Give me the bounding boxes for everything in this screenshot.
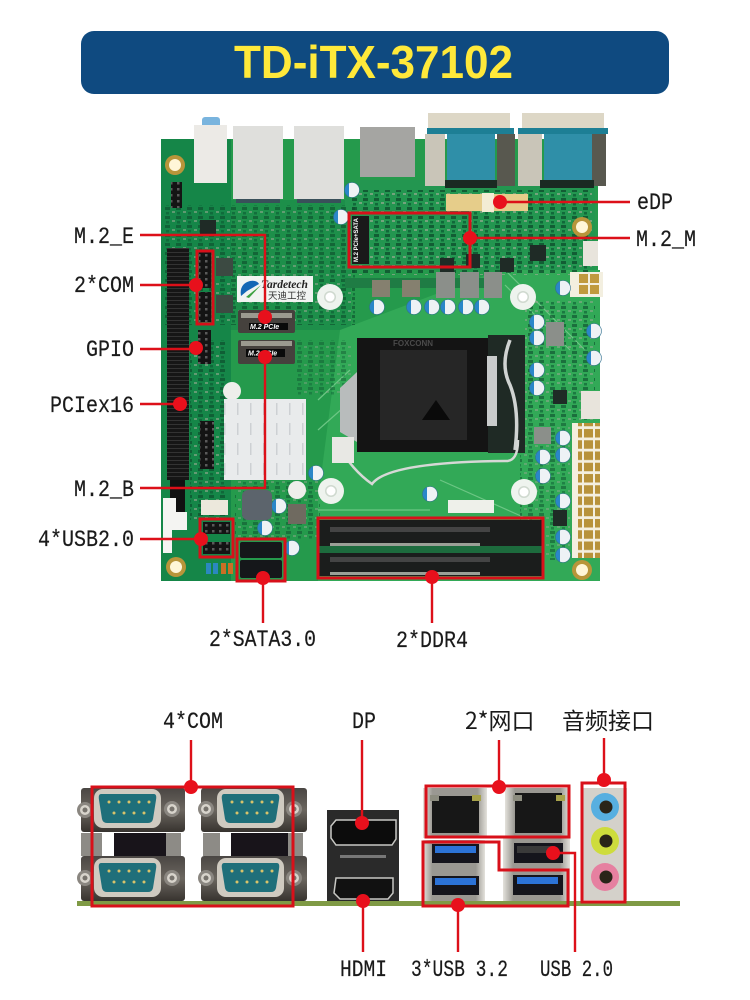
- PCB strip: [77, 901, 680, 906]
- M.2 connector 1: M.2 PCIe: [250, 324, 279, 331]
- inductors: [288, 272, 564, 524]
- callout: 4*USB2.0: [38, 519, 233, 557]
- callout: 2*网口: 2*网口: [465, 702, 535, 736]
- USB ports: [423, 838, 570, 901]
- rear IO: audio stack: [194, 117, 227, 183]
- callout: 音频接口: [562, 702, 654, 902]
- CPU socket: FOXCONN: [393, 339, 433, 348]
- SATA connectors: [240, 542, 282, 578]
- PCIe x16 slot: [163, 248, 189, 553]
- motherboard photo: [161, 113, 608, 581]
- callout: HDMI: [340, 894, 387, 983]
- CPU socket: [338, 335, 525, 484]
- M.2 M key socket: [352, 216, 369, 264]
- callout: M.2_B: [74, 350, 272, 503]
- label sticker: [448, 500, 494, 513]
- callout: eDP: [493, 190, 673, 216]
- callout: 2*SATA3.0: 2*SATA3.0: [209, 627, 316, 653]
- callout: 2*COM: 2*COM: [74, 273, 134, 299]
- GPIO header: [198, 330, 211, 364]
- 4*USB2.0 headers: [203, 522, 233, 574]
- logo: Tardetech: [237, 276, 313, 302]
- callout: PCIex16: PCIex16: [50, 393, 134, 419]
- mounting holes: [165, 155, 592, 580]
- rear panel photo: [77, 788, 680, 906]
- capacitors: [257, 182, 602, 562]
- callout: 4*USB2.0: 4*USB2.0: [38, 527, 134, 553]
- callout: 2*DDR4: [318, 518, 543, 654]
- callout: GPIO: GPIO: [86, 337, 134, 363]
- callout: USB 2.0: [540, 846, 613, 983]
- callout: eDP: eDP: [637, 190, 673, 216]
- callout: DP: DP: [352, 709, 376, 735]
- socket clip: [332, 437, 354, 463]
- COM headers: [199, 252, 233, 322]
- callout: 3*USB 3.2: [411, 842, 568, 983]
- callout: GPIO: [86, 337, 203, 363]
- callout: 4*COM: 4*COM: [163, 709, 223, 735]
- title banner: [81, 31, 669, 94]
- front header FP: [171, 182, 182, 208]
- chips: [200, 220, 567, 526]
- logo: Tardetech: 天迪工控: [268, 288, 307, 302]
- callout: M.2_B: M.2_B: [74, 477, 134, 503]
- callout: M.2_M: M.2_M: [636, 227, 696, 253]
- board PCB: [161, 139, 598, 581]
- callout: 2*SATA3.0: [209, 539, 316, 653]
- callout: M.2_E: [74, 224, 272, 324]
- rear IO: USB block: [360, 127, 415, 177]
- callout: HDMI: HDMI: [340, 957, 387, 983]
- rear IO: serial ports: [425, 113, 608, 188]
- callout: M.2_E: M.2_E: [74, 224, 134, 250]
- callout: 4*COM: [92, 709, 293, 906]
- M.2 M key socket: M.2 PCIe+SATA: [354, 217, 360, 262]
- COM ports block: [77, 788, 307, 901]
- callout: 2*网口: [426, 702, 569, 837]
- rear IO: RJ45 ports: [233, 126, 344, 203]
- eDP connector: [446, 193, 528, 212]
- callout: DP: [352, 709, 376, 830]
- audio jacks: [583, 788, 627, 900]
- LAN ports: [423, 788, 570, 838]
- callout: 音频接口: 音频接口: [562, 702, 654, 736]
- heatsink: [223, 382, 306, 499]
- callout: 2*DDR4: 2*DDR4: [396, 628, 468, 654]
- DP and HDMI ports: [327, 810, 399, 901]
- logo: Tardetech: Tardetech: [261, 279, 308, 291]
- title: TD-iTX-37102: [234, 36, 513, 88]
- DDR4 slots: [318, 520, 542, 576]
- callout: USB 2.0: USB 2.0: [540, 957, 613, 983]
- M.2 connector 2: M.2 PCIe: [248, 350, 277, 358]
- 24-pin ATX connector: [572, 423, 600, 558]
- M.2 connector 2: [238, 340, 295, 364]
- callout: 3*USB 3.2: 3*USB 3.2: [411, 957, 508, 983]
- M.2 connector 1: [238, 310, 295, 333]
- callout: 2*COM: [74, 251, 213, 324]
- callout: M.2_M: [349, 213, 696, 267]
- fan headers and power: [201, 241, 603, 515]
